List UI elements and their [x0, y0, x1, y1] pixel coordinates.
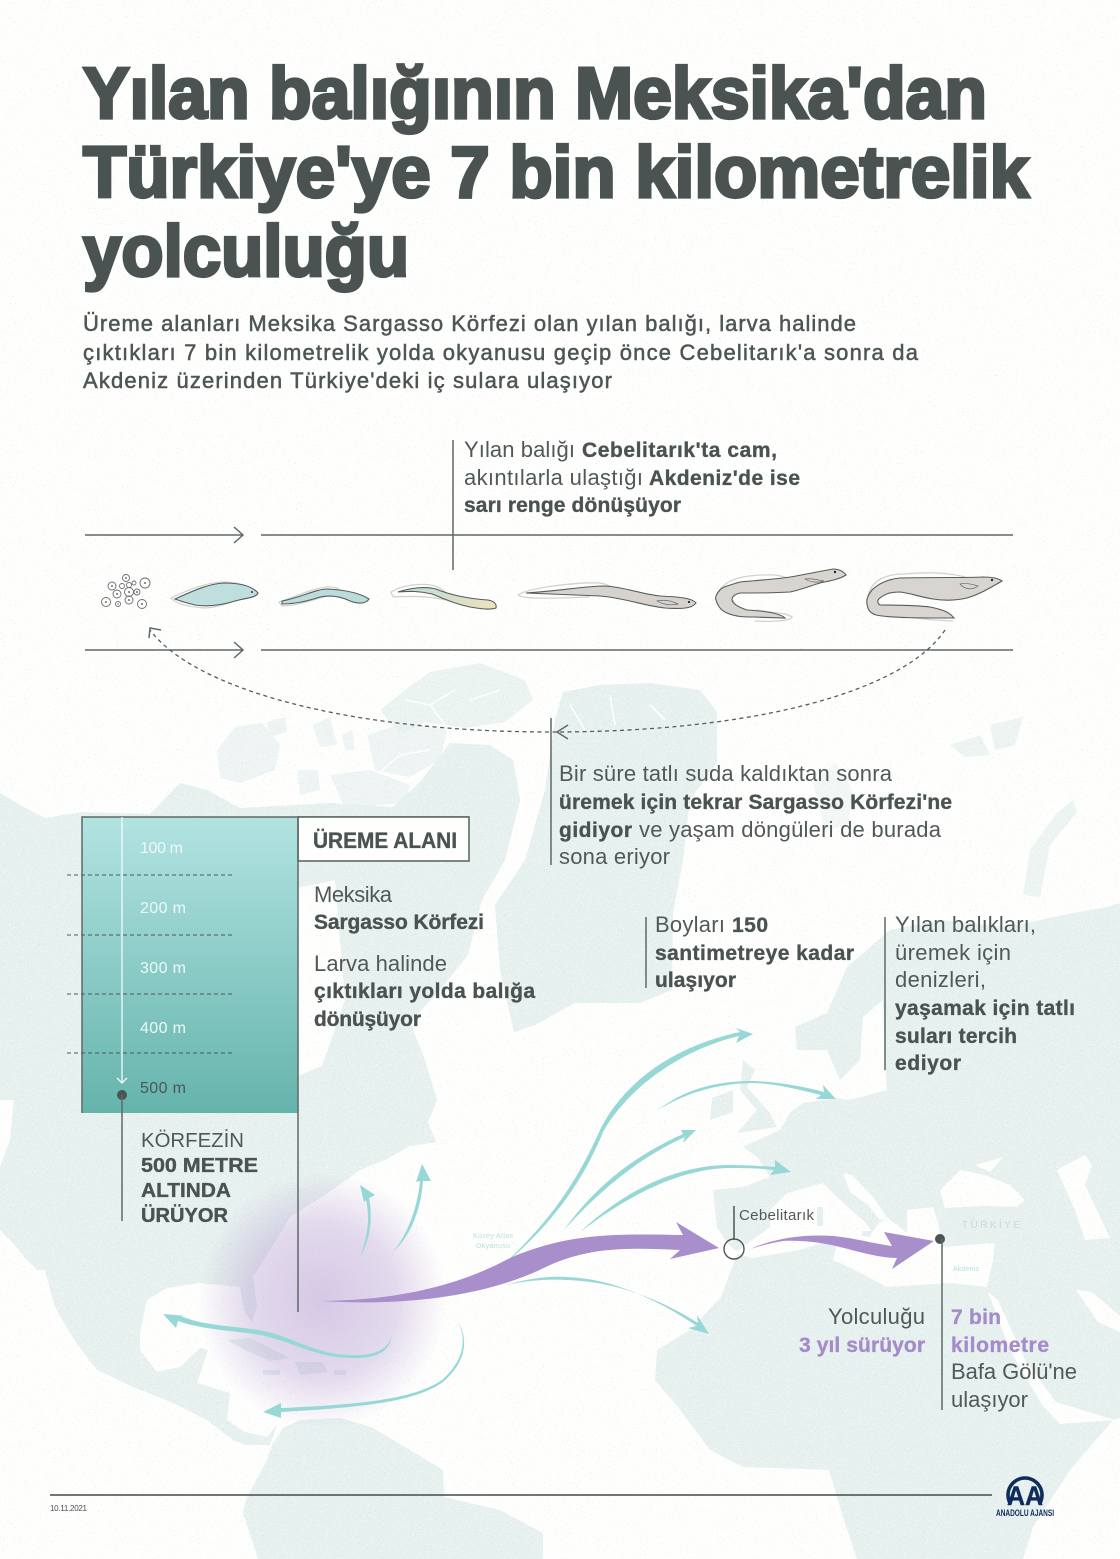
text: Sargasso: çıktıkları yolda balığa — [314, 980, 535, 1003]
callout: glass eel colour: Cebelitarık'ta cam, — [582, 439, 777, 462]
arrow: to Biscay — [580, 1160, 791, 1232]
panel: depth chart: 100 m — [140, 840, 183, 857]
map labels: Akdeniz — [953, 1266, 980, 1273]
arrow: to North Sea — [658, 1081, 836, 1110]
subtitle: Akdeniz üzerinden Türkiye'deki iç sulara ulaşıyor — [83, 368, 612, 393]
callout: glass eel colour: akıntılarla ulaştığı — [464, 465, 643, 490]
logo: Anadolu Ajansı: AA — [1007, 1481, 1043, 1511]
callout: fresh water — [885, 912, 1075, 1075]
text: distance — [951, 1306, 1077, 1412]
callout: fresh water: suları tercih — [895, 1025, 1017, 1048]
panel: depth chart: 200 m — [140, 900, 186, 917]
arrow: to Norwegian Sea — [497, 1028, 753, 1270]
title: yolculuğu — [83, 212, 409, 292]
arrow: to Gulf of Mexico — [163, 1314, 392, 1358]
text: 500 metre: KÖRFEZİN — [141, 1129, 244, 1152]
callout: return to Sargasso: üremek için tekrar Sargasso Körfezi'ne — [559, 791, 952, 814]
current arrows — [163, 1028, 836, 1418]
land: Novaya Zemlya and Svalbard — [950, 717, 1077, 897]
land: Arctic islands — [217, 717, 447, 808]
land: Greenland — [495, 683, 717, 1032]
text: duration — [799, 1304, 925, 1357]
marker: Gibraltar: Cebelitarık — [739, 1207, 814, 1224]
text: distance: ulaşıyor — [951, 1387, 1028, 1412]
icon: elver — [391, 584, 496, 609]
land: North America — [0, 743, 520, 1445]
callout: fresh water: yaşamak için tatlı — [895, 997, 1075, 1020]
land: Caribbean islands — [227, 1338, 346, 1375]
text: 500 metre: ALTINDA — [141, 1180, 231, 1202]
panel: depth chart — [67, 817, 469, 1221]
text: distance: Bafa Gölü'ne — [951, 1359, 1077, 1384]
callout: length: ulaşıyor — [655, 969, 736, 992]
land: South America — [243, 1418, 543, 1559]
arctic channels — [380, 690, 665, 772]
map labels — [473, 1218, 1020, 1273]
callout: fresh water: üremek için — [895, 940, 1011, 965]
timeline rails with arrows — [85, 527, 1013, 658]
title — [83, 54, 1030, 292]
land: British Isles — [710, 1060, 777, 1133]
arrow: to Canada 1 — [360, 1185, 375, 1257]
text: Sargasso: dönüşüyor — [314, 1008, 421, 1031]
callout: return to Sargasso — [551, 718, 952, 869]
callout: fresh water: Yılan balıkları, — [895, 912, 1036, 937]
logo: Anadolu Ajansı: ANADOLU AJANSI — [996, 1508, 1054, 1518]
purple glow: spawning area — [198, 1172, 446, 1428]
callout: length: 150 — [732, 914, 768, 937]
callout: glass eel colour: Yılan balığı — [464, 437, 575, 462]
icon: glass eel — [279, 587, 369, 606]
callout: return to Sargasso: Bir süre tatlı suda kaldıktan sonra — [559, 761, 893, 786]
land: Mediterranean islands — [817, 1207, 872, 1237]
world map background — [0, 663, 1120, 1559]
map labels: Okyanusu — [476, 1243, 510, 1250]
arrow: to Caribbean — [263, 1322, 464, 1418]
callout: fresh water: denizleri, — [895, 967, 986, 992]
subtitle: Üreme alanları Meksika Sargasso Körfezi olan yılan balığı, larva halinde — [83, 311, 856, 336]
label: spawning area: ÜREME ALANI — [313, 828, 457, 853]
text: 500 metre: ÜRÜYOR — [141, 1204, 229, 1227]
footer rule — [50, 1494, 992, 1496]
icon: adult eel — [867, 573, 1002, 621]
arrow: to Canada 2 — [392, 1164, 431, 1253]
arrow: Sargasso to Gibraltar — [322, 1222, 719, 1302]
map labels: TÜRKİYE — [962, 1218, 1020, 1231]
callout: length: santimetreye kadar — [655, 942, 854, 965]
subtitle: çıktıkları 7 bin kilometrelik yolda okyanusu geçip önce Cebelitarık'a sonra da — [83, 340, 919, 365]
text: distance: kilometre — [951, 1334, 1049, 1357]
arrow: to West Africa — [506, 1277, 709, 1334]
text: duration: 3 yıl sürüyor — [799, 1334, 925, 1357]
callout: return to Sargasso: sona eriyor — [559, 844, 670, 869]
arrow: to UK — [564, 1130, 696, 1230]
text: Sargasso — [314, 882, 535, 1031]
callout: length: Boyları — [655, 912, 725, 937]
land: Iceland faint patch — [813, 763, 853, 830]
date: 10.11.2021 — [50, 1504, 88, 1513]
marker: Bafa Lake — [935, 1234, 945, 1410]
icon: yellow eel — [518, 583, 696, 608]
callout: return to Sargasso: gidiyor — [559, 819, 632, 842]
land: Ellesmere — [380, 663, 533, 735]
icon: silver eel — [716, 569, 846, 621]
map labels: Kuzey Atlas — [473, 1233, 514, 1240]
logo: Anadolu Ajansı — [996, 1478, 1054, 1518]
subtitle — [83, 311, 919, 393]
marker: Gibraltar — [724, 1206, 814, 1259]
title: Yılan balığının Meksika'dan — [83, 54, 987, 134]
callout: glass eel colour: Akdeniz'de ise — [649, 467, 800, 490]
title: Türkiye'ye 7 bin kilometrelik — [83, 133, 1030, 213]
text: 500 metre: 500 METRE — [141, 1155, 258, 1177]
land: Eurasia and Africa — [655, 903, 1120, 1559]
text: Sargasso: Larva halinde — [314, 951, 447, 976]
text: Sargasso: Meksika — [314, 882, 393, 907]
dashed return arrow — [149, 628, 945, 739]
callout: length — [646, 912, 854, 992]
text: Sargasso: Sargasso Körfezi — [314, 911, 484, 934]
icon: eggs — [102, 574, 150, 608]
main migration route — [322, 1222, 934, 1302]
panel: depth chart: 300 m — [140, 960, 186, 977]
leader line from depth panel to Sargasso — [297, 817, 299, 1312]
callout: return to Sargasso: ve yaşam döngüleri de burada — [639, 817, 942, 842]
label: spawning area — [298, 817, 469, 861]
arrow: Gibraltar to Turkey — [750, 1232, 934, 1269]
panel: depth chart: 500 m — [140, 1080, 186, 1097]
text: distance: 7 bin — [951, 1306, 1001, 1329]
text: 500 metre — [141, 1129, 258, 1227]
text: duration: Yolculuğu — [828, 1304, 925, 1329]
seas — [0, 880, 1120, 1424]
icon: leptocephalus larva — [171, 582, 258, 608]
life stages of the eel — [102, 569, 1002, 621]
panel: depth chart: 400 m — [140, 1020, 186, 1037]
callout: fresh water: ediyor — [895, 1052, 961, 1075]
callout: glass eel colour: sarı renge dönüşüyor — [464, 494, 681, 517]
callout: glass eel colour — [453, 437, 800, 570]
